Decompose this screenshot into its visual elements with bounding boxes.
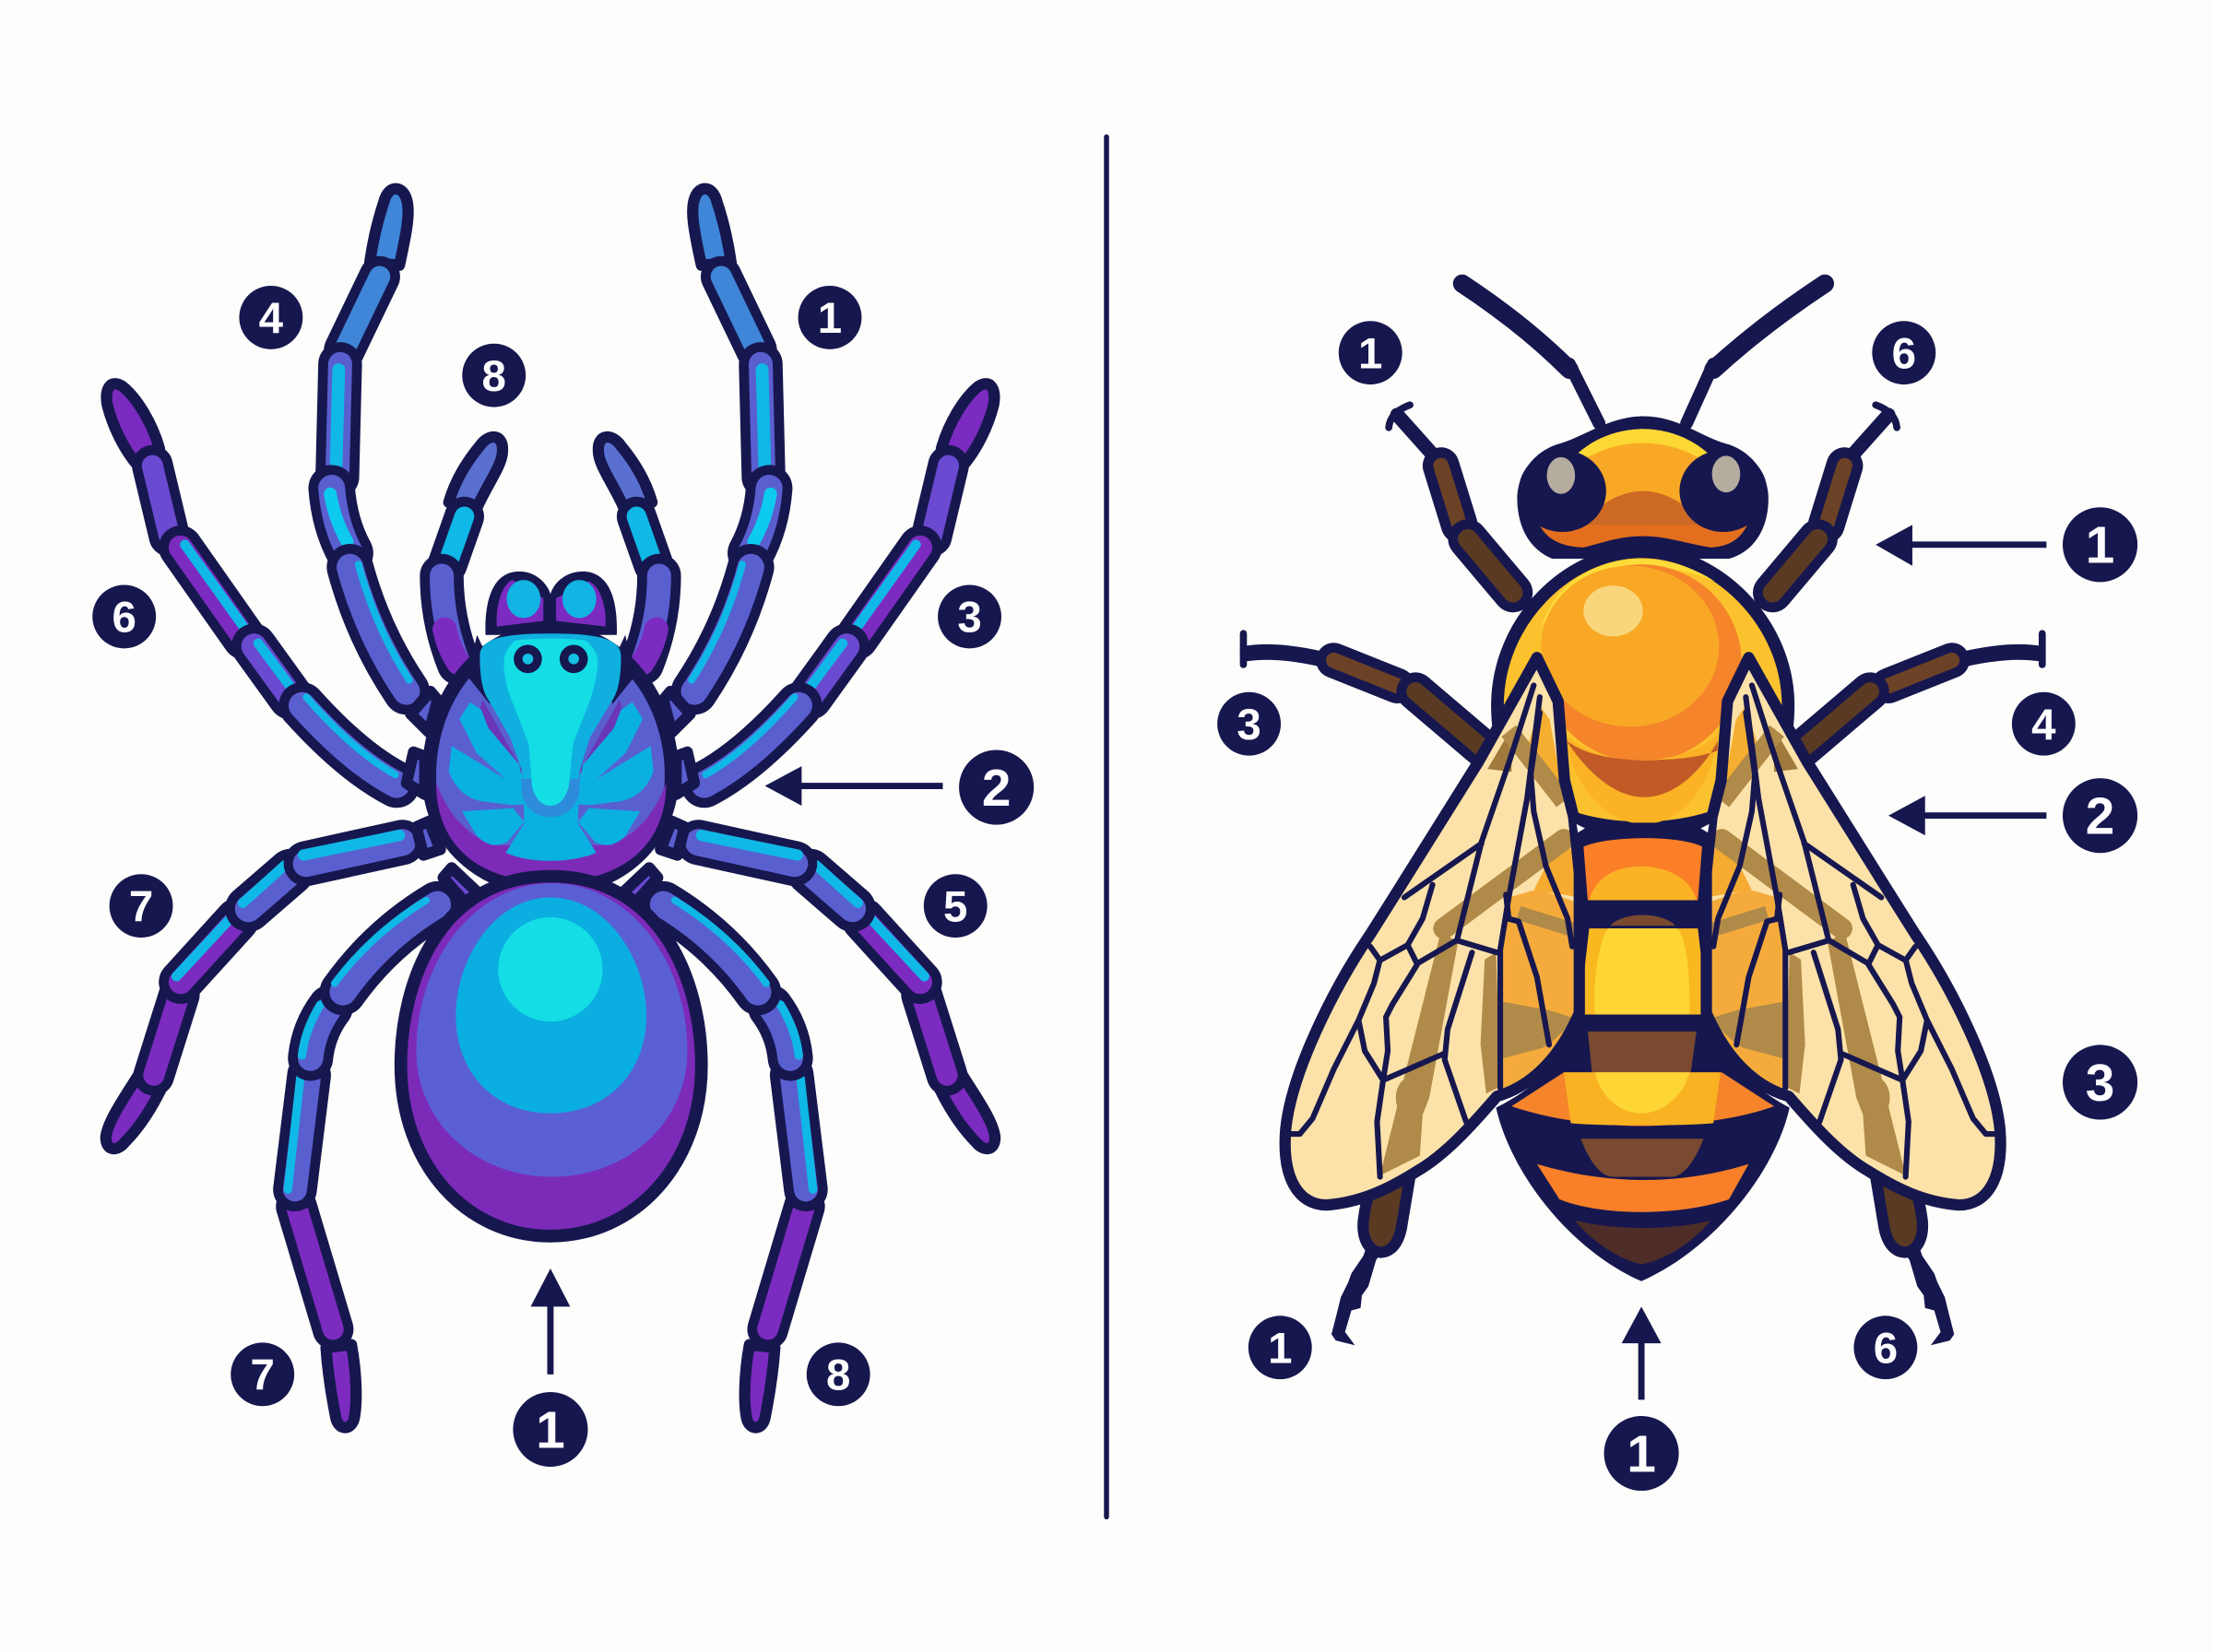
label 3 xyxy=(938,584,1001,648)
cephalothorax fan blades xyxy=(449,702,654,861)
label 6 xyxy=(1872,321,1935,384)
label 8 xyxy=(462,344,526,407)
head collar xyxy=(479,633,621,806)
label 1 lower: 1 xyxy=(1268,1325,1292,1374)
bee abdomen xyxy=(1496,822,1790,1281)
label 1: 1 xyxy=(1358,329,1382,378)
label 1 xyxy=(799,286,861,349)
spider legs right xyxy=(598,189,995,1428)
divider xyxy=(1105,136,1108,1516)
bee legs left xyxy=(1243,405,1513,1345)
label 6: 6 xyxy=(112,594,136,643)
label 6 lower: 6 xyxy=(1874,1325,1898,1374)
label 6 lower xyxy=(1853,1316,1917,1379)
bee head xyxy=(1517,417,1769,559)
label 6 xyxy=(92,584,156,648)
spider chelicerae xyxy=(485,572,617,635)
label 5 xyxy=(924,874,988,938)
label 8: 8 xyxy=(482,352,506,401)
label 4 xyxy=(2012,692,2076,756)
spider legs left xyxy=(106,189,503,1428)
head dark corners xyxy=(467,635,635,704)
label 1 bottom: 1 xyxy=(1627,1425,1656,1483)
wing veins xyxy=(1457,685,1533,952)
bee illustration xyxy=(1243,284,2042,1345)
label 7 lower xyxy=(231,1342,294,1406)
label 1 bottom xyxy=(1604,1416,1679,1491)
label 3 right xyxy=(2063,1044,2137,1120)
arrow: bee 2 xyxy=(1888,796,2046,835)
label 2 xyxy=(959,750,1034,825)
label 5: 5 xyxy=(943,882,967,931)
label 1: 1 xyxy=(818,294,842,343)
leg A left xyxy=(330,189,437,732)
bee number labels xyxy=(1217,321,2137,1491)
bee legs right xyxy=(1772,405,2042,1345)
label 3 right: 3 xyxy=(2086,1055,2114,1113)
label 2: 2 xyxy=(2086,788,2114,846)
label 3 xyxy=(1217,692,1281,756)
bee wing left xyxy=(1285,657,1580,1205)
leg C left xyxy=(106,821,441,1149)
arrow: bee 1 top xyxy=(1876,525,2046,566)
spider illustration xyxy=(106,189,995,1428)
leg B right xyxy=(676,384,994,795)
arrow: spider 2 xyxy=(765,766,942,806)
label 7 xyxy=(110,874,173,938)
label 1 bottom xyxy=(513,1392,588,1467)
wing outline xyxy=(1285,657,1580,1205)
label 2 xyxy=(2063,778,2137,853)
bee wing right xyxy=(1707,657,2001,1205)
label 1 right xyxy=(2063,507,2137,582)
leg B left xyxy=(107,384,425,795)
label 6: 6 xyxy=(1892,329,1916,378)
leg C right xyxy=(660,821,995,1149)
label 1 bottom: 1 xyxy=(536,1401,565,1459)
label 4: 4 xyxy=(259,294,284,343)
label 8 lower xyxy=(807,1342,870,1406)
spider abdomen xyxy=(401,877,702,1236)
label 2: 2 xyxy=(982,760,1011,818)
wing veins xyxy=(1752,685,1828,952)
arrow: bee 1 bottom xyxy=(1622,1306,1662,1399)
label 1 xyxy=(1339,321,1402,384)
pedipalp right xyxy=(598,437,659,663)
bee thorax xyxy=(1497,551,1788,828)
spider cephalothorax xyxy=(429,631,672,889)
waist notch highlights xyxy=(1577,824,1710,832)
bee antennae xyxy=(1462,284,1825,423)
label 1 lower xyxy=(1249,1316,1312,1379)
pedipalp left xyxy=(442,437,503,663)
spider number labels xyxy=(92,286,1034,1467)
leg D right xyxy=(622,867,813,1428)
label 3: 3 xyxy=(1237,701,1261,749)
label 3: 3 xyxy=(957,594,982,643)
label 7: 7 xyxy=(129,882,153,931)
leg A right xyxy=(663,189,771,732)
label 4: 4 xyxy=(2031,701,2056,749)
leg D left xyxy=(288,867,479,1428)
wing outline xyxy=(1707,657,2001,1205)
label 7 lower: 7 xyxy=(250,1351,275,1400)
label 1 right: 1 xyxy=(2086,517,2114,575)
label 8 lower: 8 xyxy=(826,1351,850,1400)
label 4 xyxy=(239,286,302,349)
arrow: spider 1 xyxy=(531,1268,570,1375)
